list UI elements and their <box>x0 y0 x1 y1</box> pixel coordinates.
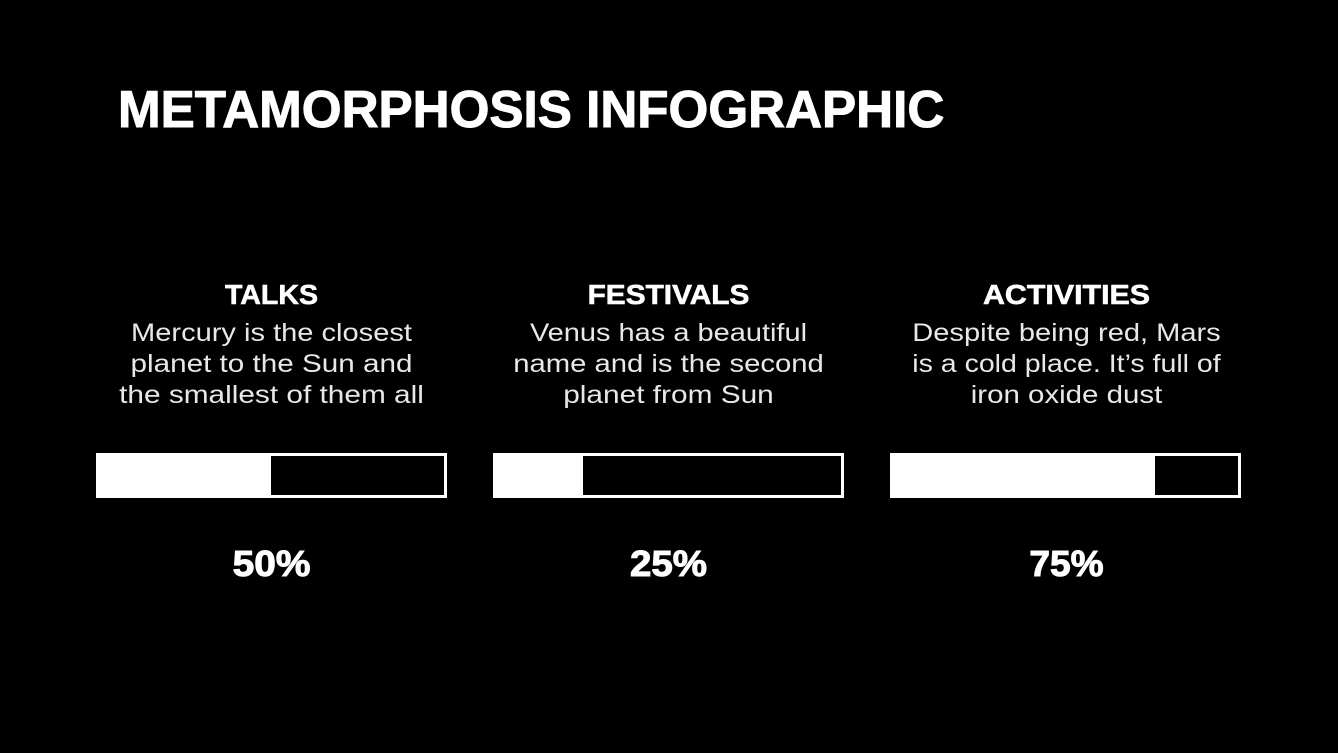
text: talks description: the smallest of them all <box>119 381 424 409</box>
progress bar: talks 50% <box>96 453 447 498</box>
text: activities description <box>912 318 1221 409</box>
percentage: festivals: 25% <box>630 543 707 584</box>
text: festivals description: planet from Sun <box>563 381 774 409</box>
text: activities description: is a cold place. It’s full of <box>912 350 1221 378</box>
text: festivals description: name and is the second <box>513 350 824 378</box>
panel: festivals <box>493 279 844 584</box>
text: festivals description <box>513 318 824 409</box>
text: talks description: Mercury is the closest <box>131 318 412 346</box>
progress bar: activities 75% <box>890 453 1241 498</box>
percentage: activities: 75% <box>1029 543 1104 584</box>
percentage: talks: 50% <box>233 543 310 584</box>
text: talks description: planet to the Sun and <box>131 350 412 378</box>
text: activities description: iron oxide dust <box>971 381 1162 409</box>
heading: festivals: FESTIVALS <box>588 279 749 310</box>
panel: activities <box>890 279 1241 584</box>
heading: activities: ACTIVITIES <box>983 279 1150 310</box>
text: festivals description: Venus has a beautiful <box>530 318 807 346</box>
text: activities description: Despite being red, Mars <box>912 318 1221 346</box>
text: talks description <box>119 318 424 409</box>
progress bar: festivals 25% <box>493 453 844 498</box>
heading: talks: TALKS <box>225 279 318 310</box>
title: METAMORPHOSIS INFOGRAPHIC <box>118 81 944 139</box>
panel: talks <box>96 279 447 584</box>
